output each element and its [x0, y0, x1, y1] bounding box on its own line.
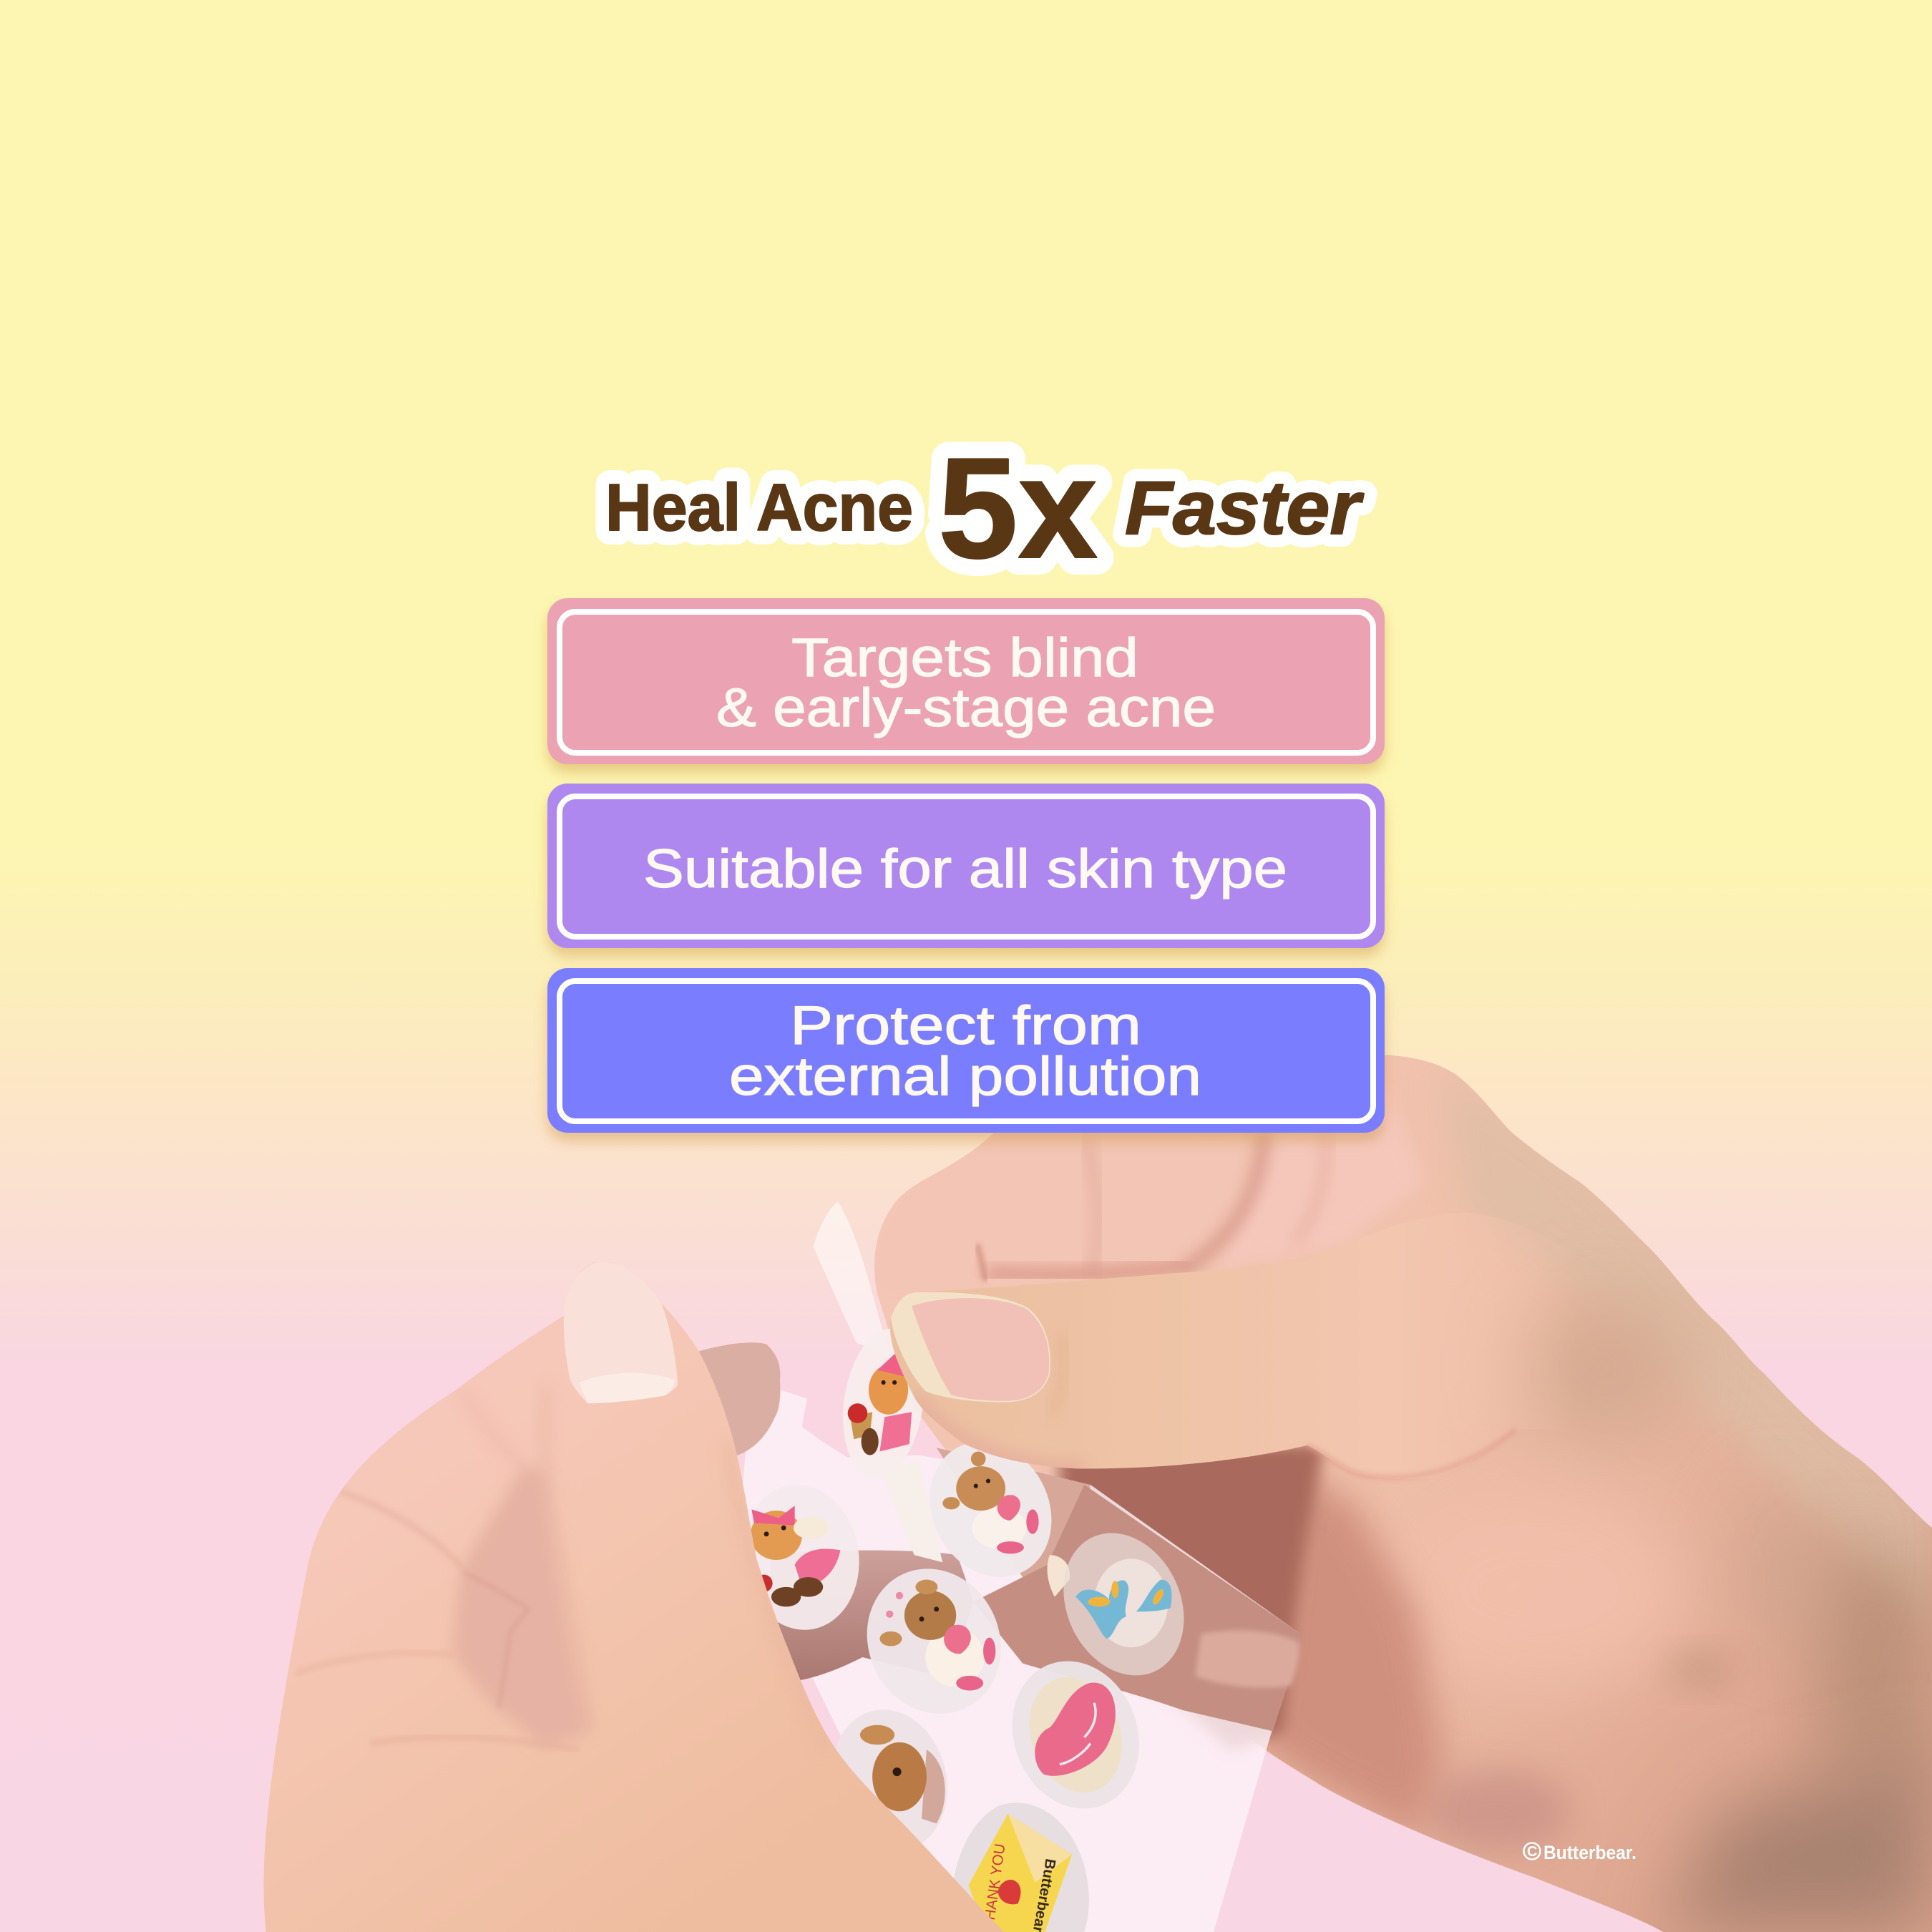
- heading words: white outline: Faster: [1125, 466, 1365, 550]
- copyright mark: Butterbear.: [1543, 1842, 1636, 1863]
- sticker: bear with heart: [907, 1420, 1075, 1599]
- thumb crease: [1307, 1429, 1516, 1478]
- panel: suitable for all skin type: Suitable for all skin type: [643, 839, 1287, 899]
- sticker: butterflies: [1041, 1513, 1206, 1695]
- right hand: back of hand and index finger: [874, 1055, 1932, 1932]
- heading words: white outline: Heal Acne: [605, 470, 913, 545]
- photo: hands holding acne patch sheet: [264, 1055, 1932, 1932]
- copyright mark: C: [1527, 1844, 1537, 1860]
- thumb nail: [891, 1292, 1050, 1402]
- panel: targets blind and early-stage acne: Targets blind: [791, 628, 1138, 688]
- infographic canvas: [0, 441, 1932, 1932]
- heading text: 5x: 5x: [938, 429, 1098, 588]
- nail seen through the sheet: [1048, 1555, 1070, 1597]
- sheet tab behind the index finger: [813, 1201, 883, 1346]
- index finger nail: [564, 1262, 678, 1403]
- heading words: white outline: 5x: [938, 429, 1098, 588]
- sticker: bear face partly hidden: [817, 1697, 962, 1863]
- sticker: bear with strawberries: [834, 1324, 933, 1483]
- sticker: yellow envelope: THANK YOU: [980, 1843, 1009, 1930]
- fingers seen through the sheet: [770, 1448, 1300, 1731]
- right hand: thumb in front of the sheet: [890, 1212, 1577, 1479]
- heading text: Heal Acne: Heal Acne: [605, 470, 913, 545]
- transparent patch sheet: [739, 1376, 1300, 1932]
- panel: targets blind and early-stage acne: [547, 598, 1385, 764]
- left hand with index finger and nail: [264, 1262, 1004, 1932]
- palm cavity in shadow behind the sheet: [1060, 1444, 1324, 1750]
- panel: targets blind and early-stage acne: & early-stage acne: [716, 678, 1216, 738]
- sticker: bear with heart, front: [844, 1546, 1025, 1736]
- heading text: Faster: Faster: [1125, 466, 1365, 550]
- heading: Heal Acne 5x Faster: [605, 429, 1365, 588]
- panel: protect from external pollution: Protect from: [790, 995, 1141, 1056]
- heading words: white outline: [605, 429, 1365, 588]
- palm cavity between the curled fingers: [454, 1465, 587, 1748]
- sticker: bear with pink dress: [733, 1478, 869, 1637]
- panel: protect from external pollution: [547, 968, 1385, 1133]
- white backing under the stickers: [881, 1460, 942, 1562]
- sticker: yellow envelope: [950, 1802, 1089, 1932]
- sticker: yellow envelope: Butterbear: [1030, 1858, 1059, 1932]
- left hand back finger tip: [698, 1342, 780, 1456]
- sticker: love heart: [992, 1643, 1159, 1827]
- panel: suitable for all skin type: [547, 784, 1385, 948]
- panel: protect from external pollution: external pollution: [729, 1046, 1201, 1107]
